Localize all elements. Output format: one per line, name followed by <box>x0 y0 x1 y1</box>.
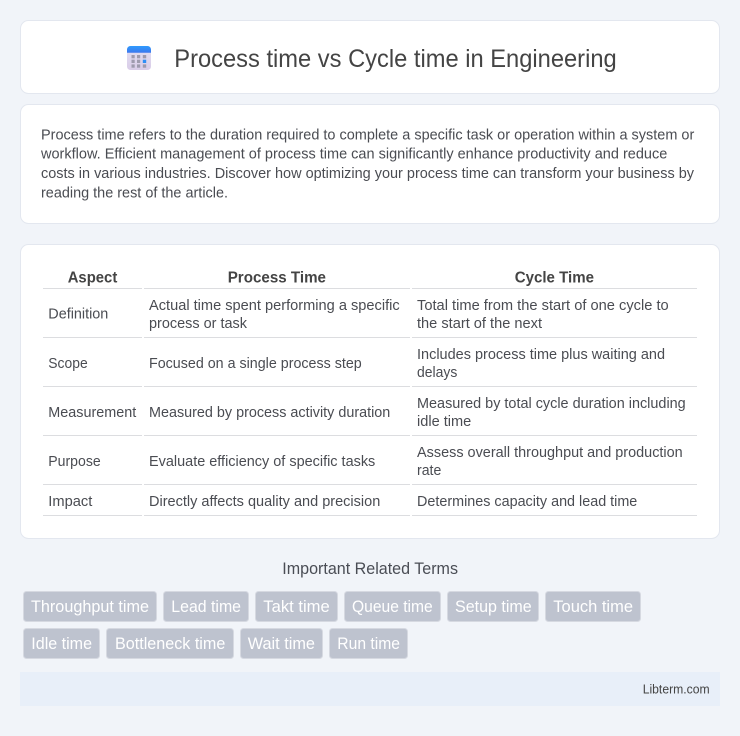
table header row <box>68 270 594 287</box>
table row: Purpose <box>48 445 683 479</box>
table row: Scope: Includes process time plus waiting and <box>417 347 665 363</box>
tag: Throughput time: Throughput time <box>31 597 149 616</box>
table row: Impact <box>48 494 637 510</box>
tag: Lead time <box>164 592 248 622</box>
tag: Run time <box>330 628 408 658</box>
table row: Definition: the start of the next <box>417 316 542 332</box>
tag: Takt time: Takt time <box>263 597 330 616</box>
text block: introduction paragraph: Process time refers to the duration required to complete a specific task or operation within a system or <box>41 127 694 143</box>
title: Process time vs Cycle time in Engineering <box>174 45 617 73</box>
panel: introduction <box>20 104 720 224</box>
panel: comparison table <box>20 244 720 538</box>
table row: Definition: Actual time spent performing a specific <box>149 298 400 314</box>
tag: Queue time <box>344 592 440 622</box>
tag: Wait time <box>240 628 322 658</box>
table row: Purpose: Purpose <box>48 454 101 470</box>
text block: introduction paragraph <box>40 127 695 201</box>
table row: Measurement <box>48 396 686 430</box>
table row: Scope: Focused on a single process step <box>149 356 362 372</box>
table header row: Cycle Time <box>515 270 594 287</box>
tag: Queue time: Queue time <box>352 597 433 616</box>
table row: Purpose: Evaluate efficiency of specific tasks <box>149 454 375 470</box>
table row: Impact: Directly affects quality and precision <box>149 494 380 510</box>
tag: Takt time <box>256 592 338 622</box>
tag: Touch time <box>546 592 640 622</box>
table row: Impact: Impact <box>48 494 92 510</box>
table header row: Process Time <box>228 270 326 287</box>
heading: important related terms: Important Related Terms <box>282 559 458 578</box>
tag: Wait time: Wait time <box>248 634 315 653</box>
text block: introduction paragraph: reading the rest of the article. <box>41 185 228 201</box>
tag: Lead time: Lead time <box>171 597 241 616</box>
tag: Run time: Run time <box>337 634 400 653</box>
panel: header <box>20 20 720 94</box>
footer <box>20 672 720 706</box>
footer source link: Libterm.com <box>643 681 710 696</box>
tag: Setup time: Setup time <box>455 597 532 616</box>
table row: Measurement: idle time <box>417 414 471 430</box>
table row: Definition: process or task <box>149 316 248 332</box>
table row: Scope <box>48 347 665 381</box>
table header row: Aspect <box>68 270 118 287</box>
tag: Idle time <box>24 628 100 658</box>
tag: Bottleneck time <box>106 628 234 658</box>
table row: Measurement: Measured by total cycle duration including <box>417 396 686 412</box>
table row: Purpose: rate <box>417 463 441 479</box>
tag: Touch time: Touch time <box>553 597 633 616</box>
text block: introduction paragraph: costs in various industries. Discover how optimizing your process time can transform your business by <box>41 166 695 182</box>
tag: Bottleneck time: Bottleneck time <box>115 634 225 653</box>
table row: Definition: Definition <box>48 307 108 323</box>
tag: Setup time <box>448 592 538 622</box>
table row: Scope: Scope <box>48 356 88 372</box>
icon: calendar <box>127 46 151 70</box>
tag: Idle time: Idle time <box>31 634 92 653</box>
table row: Definition <box>48 298 669 332</box>
table row: Measurement: Measurement <box>48 405 136 421</box>
table row: Measurement: Measured by process activity duration <box>149 405 390 421</box>
related terms tags <box>24 592 640 658</box>
text block: introduction paragraph: workflow. Efficient management of process time can significantly enhance productivity and reduce <box>40 146 667 162</box>
tag: Throughput time <box>24 592 156 622</box>
table row: Impact: Determines capacity and lead time <box>417 494 637 510</box>
table row: Definition: Total time from the start of one cycle to <box>417 298 669 314</box>
table row: Purpose: Assess overall throughput and production <box>417 445 683 461</box>
table row: Scope: delays <box>417 365 457 381</box>
